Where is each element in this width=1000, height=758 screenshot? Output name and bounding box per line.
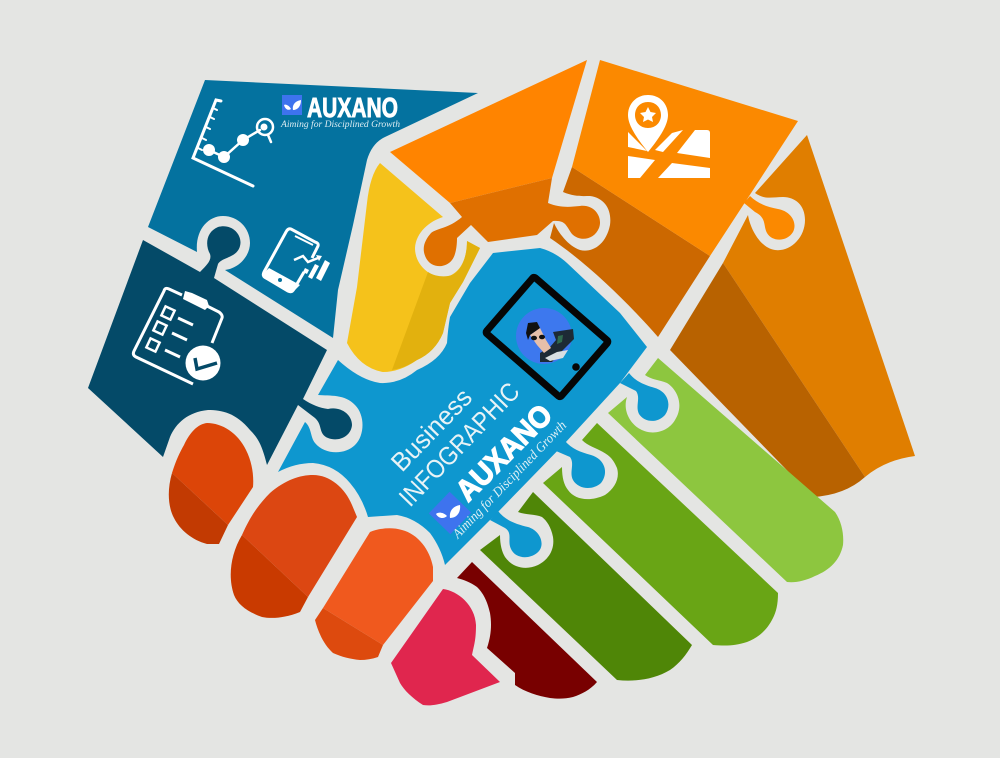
- panel: orange upper-left finger piece: [390, 60, 600, 266]
- panel: dark green finger: [480, 492, 692, 681]
- yellow piece shaded side: [392, 241, 480, 370]
- portrait circle: [516, 308, 572, 364]
- heading: Business INFOGRAPHIC: INFOGRAPHIC: [393, 376, 525, 512]
- panel: orange finger one: [169, 423, 253, 544]
- puzzle tab: palm tab into light green: [620, 373, 668, 421]
- panel: teal top-left puzzle piece: [148, 80, 478, 338]
- icon: tablet with portrait: [485, 277, 609, 397]
- icon: phone with rising chart: [263, 229, 330, 292]
- icon: map with location pin: [628, 95, 710, 178]
- logo: top Auxano: Aiming for Disciplined Growth: [280, 119, 400, 130]
- shaded lower band: [670, 263, 865, 497]
- finger three shading: [315, 608, 383, 660]
- icon: line chart with magnifier: [193, 100, 273, 186]
- panel: orange finger two: [231, 475, 357, 618]
- panel: orange map piece with tab: [572, 60, 798, 256]
- panel: yellow thumb piece: [347, 163, 480, 372]
- heading: Business INFOGRAPHIC: Business: [385, 382, 478, 477]
- finger two shading: [231, 535, 308, 618]
- panel: dark navy clipboard puzzle piece with tabs: [88, 226, 352, 465]
- panel: medium green finger: [543, 423, 778, 646]
- logo: rotated Auxano: Aiming for Disciplined Growth: [449, 418, 569, 542]
- portrait person: [526, 322, 574, 362]
- panel: dark orange middle piece: [550, 167, 710, 337]
- panel: central blue palm piece: [278, 248, 647, 565]
- panel: maroon finger: [457, 562, 597, 699]
- tablet home button: [572, 363, 580, 371]
- panel: light green finger: [608, 358, 843, 582]
- puzzle tab: palm tab into dark green: [490, 511, 542, 557]
- darker orange lower band with tabs: [424, 178, 600, 266]
- panel: orange finger three: [315, 528, 433, 660]
- icon: checklist clipboard: [133, 288, 222, 384]
- logo: rotated Auxano: AUXANO: [450, 398, 559, 508]
- finger one shading: [169, 473, 228, 544]
- puzzle tab: palm tab into medium green: [556, 441, 605, 488]
- logo: top Auxano: AUXANO: [307, 92, 398, 123]
- panel: far right orange piece: [670, 135, 915, 497]
- logo: top Auxano: [280, 92, 400, 130]
- panel: pink finger: [391, 589, 500, 705]
